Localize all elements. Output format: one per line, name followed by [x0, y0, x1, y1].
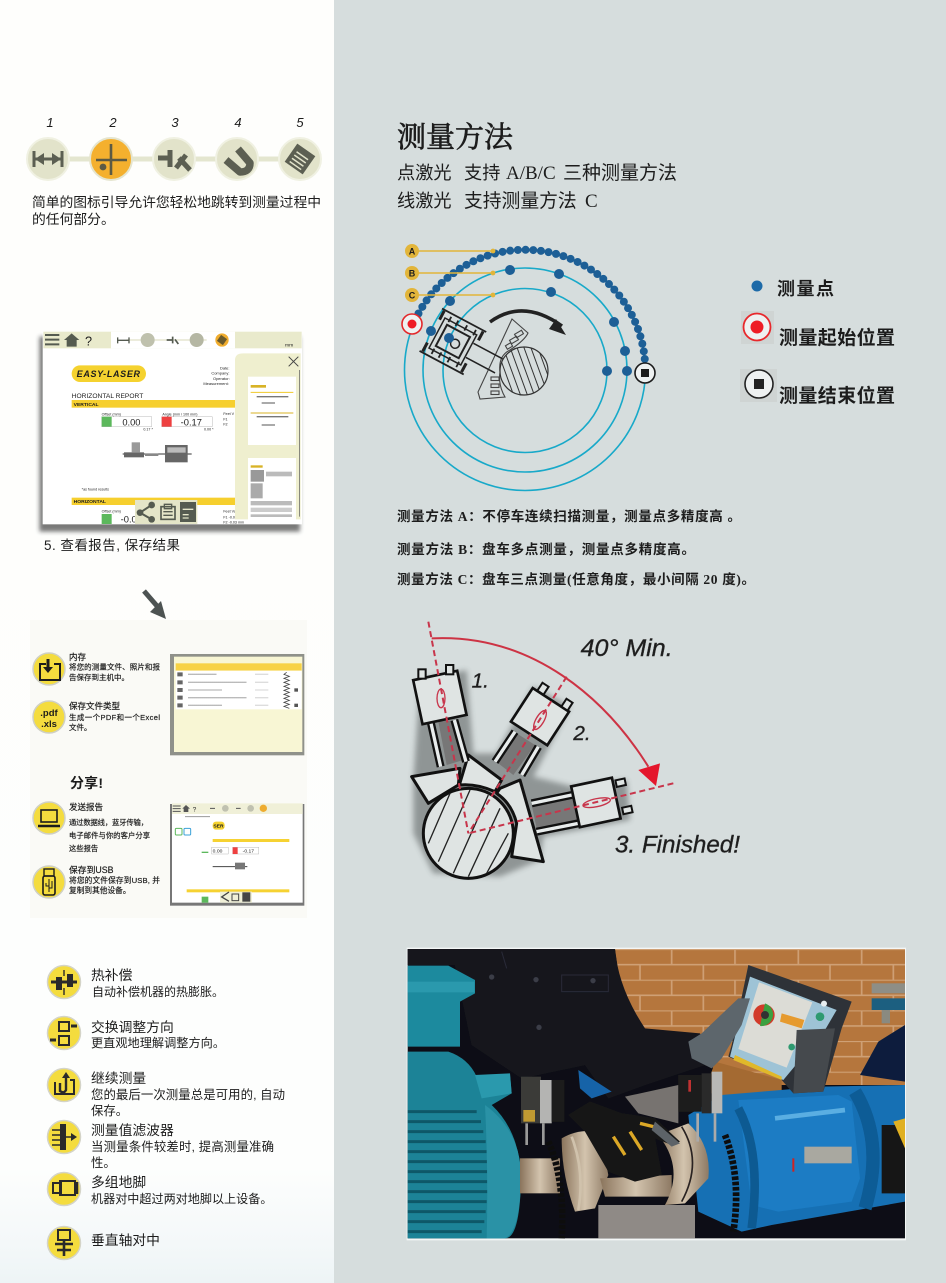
feature: multiple feet pairs: 机器对中超过两对地脚以上设备。 [91, 1191, 272, 1206]
brown backing block [705, 1062, 782, 1097]
screenshot caption: 5. 查看报告, 保存结果 [44, 538, 180, 553]
thumbnail side panel [235, 353, 301, 520]
navigation description [32, 194, 321, 227]
step 3 icon: sensors [153, 138, 195, 180]
text: file types [69, 701, 160, 732]
feature: vertical shaft alignment: 垂直轴对中 [91, 1232, 160, 1248]
feature: swap adjustment direction [48, 1016, 225, 1050]
feature: thermal compensation [48, 966, 224, 999]
report body: Company: [211, 371, 230, 376]
app toolbar: ? [85, 334, 92, 348]
app toolbar [43, 332, 302, 349]
report body: F2 -0.03 mm [223, 520, 244, 524]
workshop photo [407, 948, 906, 1240]
legend: measurement point [752, 279, 834, 299]
feature: thermal compensation: 自动补偿机器的热膨胀。 [92, 984, 224, 999]
report body: F1 [223, 417, 228, 421]
legend [740, 279, 895, 407]
legend: start position: 测量起始位置 [779, 326, 895, 349]
method descriptions: 测量方法 B：盘车多点测量，测量点多精度高。 [397, 541, 695, 557]
tablet [728, 965, 852, 1093]
share screen: ? [193, 806, 197, 813]
text: file types: 文件。 [69, 722, 92, 732]
laser support lines: C [585, 191, 598, 212]
method descriptions: 测量方法 C：盘车三点测量(任意角度，最小间隔 20 度)。 [397, 571, 755, 587]
teal motor [408, 966, 521, 1238]
label lines A B C: B [409, 268, 416, 278]
position 3 sensor [532, 778, 633, 832]
feature: resume measurement: 您的最后一次测量总是可用的, 自动 [91, 1087, 285, 1102]
text: send report [69, 802, 150, 853]
icon: pdf xls: .xls [41, 719, 57, 730]
legend: end position: 测量结束位置 [779, 384, 895, 407]
continuous measurement points [418, 250, 645, 362]
label lines A B C [405, 244, 495, 302]
app toolbar: mm [285, 343, 293, 349]
report body: Feet V [223, 412, 235, 416]
legend: end position [740, 369, 895, 407]
position 2 sensor [495, 683, 573, 775]
laser support lines: 线激光 [397, 191, 452, 211]
diagram labels: 3. Finished! [615, 832, 740, 859]
shadow [413, 670, 630, 877]
sensor unit [420, 309, 510, 387]
blue motor housing behind worker [578, 1070, 612, 1098]
text: memory: 告保存到主机中。 [69, 672, 129, 682]
feature: measurement filter [48, 1120, 274, 1170]
report body: Offset (mm) [102, 413, 121, 417]
feature list [48, 966, 285, 1260]
laser support lines: 点激光 [397, 163, 452, 183]
report screenshot [39, 332, 302, 532]
memory screen [170, 654, 304, 755]
text: save to usb: 保存到USB [69, 864, 114, 875]
diagram labels: 2. [572, 722, 591, 745]
worker torso and arm [408, 949, 715, 1098]
step 2 icon: target, active [90, 138, 132, 180]
share and save toolbar [135, 500, 197, 524]
method descriptions: 测量方法 A：不停车连续扫描测量，测量点多精度高 。 [397, 508, 741, 524]
report body: HORIZONTAL REPORT [72, 393, 143, 400]
icon: usb [33, 866, 65, 898]
laser support lines: 支持 [464, 163, 500, 183]
report body: Operator: [213, 376, 230, 381]
step numbers [46, 115, 304, 130]
feature: thermal compensation: 热补偿 [91, 968, 133, 983]
step numbers: 5 [296, 115, 304, 130]
red laser lines [428, 622, 673, 833]
shaft [423, 788, 513, 878]
share screen: 0.00 [213, 849, 223, 855]
left column background [0, 0, 334, 1283]
diagram labels: 1. [472, 670, 489, 693]
panel: save and share [30, 620, 307, 918]
text: save to usb [69, 864, 160, 895]
report body [72, 365, 244, 525]
measurement point over sensor [444, 333, 454, 343]
icon: pdf xls: .pdf [40, 708, 59, 719]
step numbers: 2 [108, 115, 117, 130]
feature: resume measurement [48, 1068, 285, 1118]
legend: measurement point: 测量点 [777, 279, 834, 299]
text: send report: 通过数据线，蓝牙传输， [69, 818, 148, 827]
report body: *as found results [82, 488, 109, 492]
shaft [500, 347, 548, 395]
report body: 0.00 [122, 417, 140, 427]
red angle arc [432, 638, 660, 786]
report body: Feet Value [223, 510, 241, 514]
text: memory: 内存 [69, 652, 87, 662]
text: save to usb: 将您的文件保存到USB, 并 [69, 875, 160, 885]
pipework [860, 983, 905, 1082]
step numbers: 4 [234, 115, 242, 130]
report body: -0.17 [181, 417, 202, 427]
report body: 0.17 * [143, 428, 153, 432]
rotation arrow [490, 311, 566, 335]
position 1 sensor [413, 665, 467, 767]
share screen [170, 803, 304, 906]
text: file types: 保存文件类型 [69, 701, 121, 711]
feature: resume measurement: 继续测量 [91, 1071, 146, 1086]
arrow: down to storage panel [144, 591, 166, 619]
diagram labels [472, 635, 740, 859]
report body: HORIZONTAL [74, 499, 106, 505]
chains [548, 1135, 736, 1238]
measurement rings [404, 250, 646, 490]
step 4 icon: clamp [216, 138, 258, 180]
grey machine part behind coupling [625, 1085, 678, 1123]
share heading: 分享! [70, 775, 103, 791]
text: send report: 电子邮件与你的客户分享 [69, 831, 150, 840]
start marker [402, 314, 422, 334]
report logo [72, 365, 146, 382]
text: send report: 这些报告 [69, 844, 98, 853]
gloved hand on coupling [568, 1102, 680, 1182]
text: memory [69, 652, 160, 682]
step navigation [27, 115, 321, 180]
machine drawing [123, 442, 192, 462]
discrete measurement points [426, 265, 632, 376]
feature: measurement filter: 当测量条件较差时, 提高测量准确 [91, 1139, 274, 1154]
measurement path diagram [402, 244, 655, 490]
feature: measurement filter: 性。 [91, 1156, 116, 1170]
icon: pdf xls [33, 701, 65, 733]
laser support lines: 三种测量方法 [563, 162, 677, 184]
legend: start position [741, 311, 895, 349]
navigation description: 简单的图标引导允许您轻松地跳转到测量过程中 [32, 194, 321, 210]
mount brackets [412, 755, 543, 862]
mount brackets [478, 319, 528, 399]
report logo: EASY-LASER [77, 369, 140, 379]
icon: memory [33, 653, 65, 685]
report body: F1 -0.03 [223, 515, 237, 519]
feature: measurement filter: 测量值滤波器 [91, 1123, 174, 1138]
blue pump [688, 1085, 905, 1232]
title: 测量方法 [397, 121, 514, 154]
text: memory: 将您的测量文件、照片和报 [69, 662, 160, 672]
feature: swap adjustment direction: 更直观地理解调整方向。 [91, 1035, 225, 1050]
share screen: -0.17 [243, 849, 254, 855]
label lines A B C: A [409, 246, 416, 256]
glove holding tablet [688, 998, 750, 1068]
step 1 icon: distance [27, 138, 69, 180]
text: send report: 发送报告 [69, 802, 103, 812]
feature: swap adjustment direction: 交换调整方向 [91, 1019, 174, 1035]
feature: vertical shaft alignment [48, 1226, 160, 1260]
step numbers: 1 [46, 115, 54, 130]
laser support lines [397, 162, 677, 212]
share screen: SER [213, 824, 224, 830]
step 5 icon: report [279, 138, 321, 180]
feature: multiple feet pairs [48, 1172, 272, 1206]
label lines A B C: C [409, 290, 416, 300]
right column background [334, 0, 946, 1283]
report body: F2 [223, 422, 228, 426]
coupling [520, 1123, 709, 1238]
three-point rotation diagram [412, 622, 740, 878]
brick wall [615, 949, 905, 1085]
sensors [521, 1072, 722, 1145]
text: save to usb: 复制到其他设备。 [69, 885, 131, 895]
report body: VERTICAL [74, 402, 99, 408]
step numbers: 3 [171, 115, 179, 130]
report body: 0.00 * [204, 428, 214, 432]
method descriptions [397, 508, 755, 587]
report body: Measurement: [203, 381, 229, 386]
report body: -0.0 [121, 515, 137, 525]
text: file types: 生成一个PDF和一个Excel [69, 712, 160, 722]
report body: Angle (mm / 100 mm) [162, 413, 197, 417]
report body: Offset (mm) [102, 510, 121, 514]
navigation description: 的任何部分。 [32, 212, 115, 227]
feature: multiple feet pairs: 多组地脚 [91, 1174, 146, 1190]
report body: Date: [220, 365, 230, 370]
laser support lines: A/B/C [506, 163, 556, 184]
icon: laptop [33, 802, 65, 834]
laser support lines: 支持测量方法 [464, 190, 577, 211]
feature: resume measurement: 保存。 [91, 1104, 128, 1118]
end marker [635, 363, 655, 383]
diagram labels: 40° Min. [581, 635, 673, 662]
